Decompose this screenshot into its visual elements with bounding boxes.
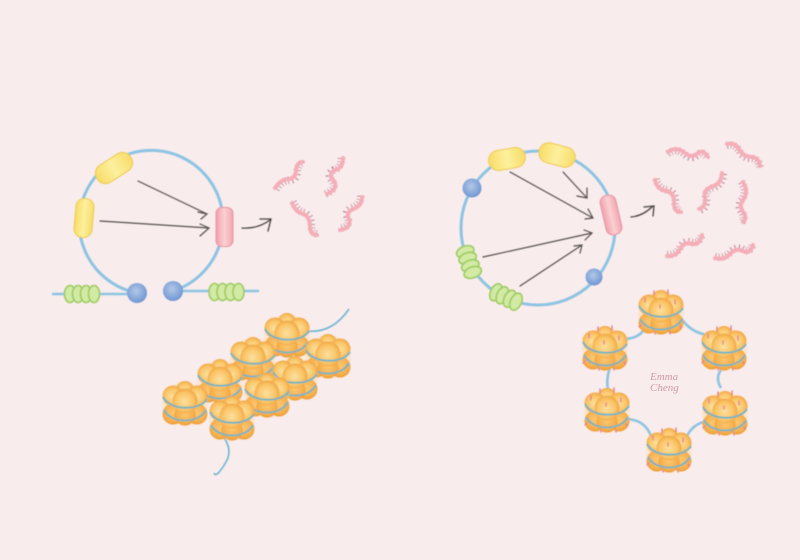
- worm 6: [667, 234, 702, 256]
- curved output arrow: [242, 219, 271, 231]
- left DNA ring: [79, 150, 223, 293]
- blue ball upper: [462, 178, 482, 198]
- right DNA ring: [461, 151, 615, 305]
- nucleosome 1: [264, 313, 310, 358]
- nucleosome upper left: [582, 326, 628, 371]
- pink target gene: [599, 194, 623, 236]
- nucleosome lower right: [702, 391, 748, 436]
- panel: compact chromatin cluster: [162, 309, 351, 475]
- worm 1: [275, 162, 304, 189]
- worm 5: [739, 182, 746, 222]
- green beads right: [209, 284, 244, 300]
- nucleosome 4: [272, 356, 318, 401]
- linker DNA: [607, 318, 721, 438]
- nucleosome 3: [230, 337, 276, 382]
- arrows to pink gene: [100, 181, 209, 236]
- nucleosome 5: [197, 359, 243, 404]
- DNA tail bottom: [212, 425, 229, 475]
- blue ball left: [127, 283, 147, 303]
- signature: Emma: [649, 371, 679, 383]
- panel: open chromatin ring: [582, 290, 748, 473]
- blue ball right: [163, 281, 183, 301]
- nucleosome top: [638, 290, 684, 335]
- nucleosome 7: [162, 381, 208, 426]
- green beads left: [455, 243, 483, 281]
- nucleosome 6: [244, 373, 290, 418]
- panel: left transcripts: [275, 158, 362, 235]
- signature: Cheng: [650, 382, 679, 394]
- panel: right transcripts: [655, 144, 760, 259]
- nucleosome 8: [209, 396, 255, 441]
- nucleosome lower left: [584, 388, 630, 433]
- arrows to pink gene: [483, 172, 593, 286]
- yellow gene upper: [92, 149, 136, 187]
- green beads bottom: [487, 282, 525, 312]
- nucleosome upper right: [701, 326, 747, 371]
- worm 4: [339, 196, 362, 230]
- nucleosome 2: [305, 334, 351, 379]
- panel: left plasmid with separated ends: [52, 149, 271, 303]
- blue ball lower: [586, 268, 602, 286]
- green beads left: [64, 286, 100, 302]
- worm 1: [668, 149, 708, 158]
- worm 3: [292, 202, 318, 235]
- worm 3: [655, 179, 682, 212]
- worm 2: [727, 144, 760, 168]
- yellow gene left: [487, 146, 527, 172]
- curved output arrow: [631, 206, 654, 217]
- left DNA strand tails: [52, 291, 259, 294]
- worm 2: [326, 158, 343, 194]
- worm 4: [699, 173, 723, 210]
- panel: right closed plasmid: [455, 141, 654, 312]
- signature: [649, 371, 679, 394]
- worm 7: [715, 244, 753, 259]
- DNA tail top: [306, 309, 349, 331]
- yellow gene right: [537, 141, 577, 169]
- pink target gene: [216, 208, 233, 246]
- nucleosome bottom: [646, 428, 692, 473]
- yellow gene lower: [73, 198, 95, 238]
